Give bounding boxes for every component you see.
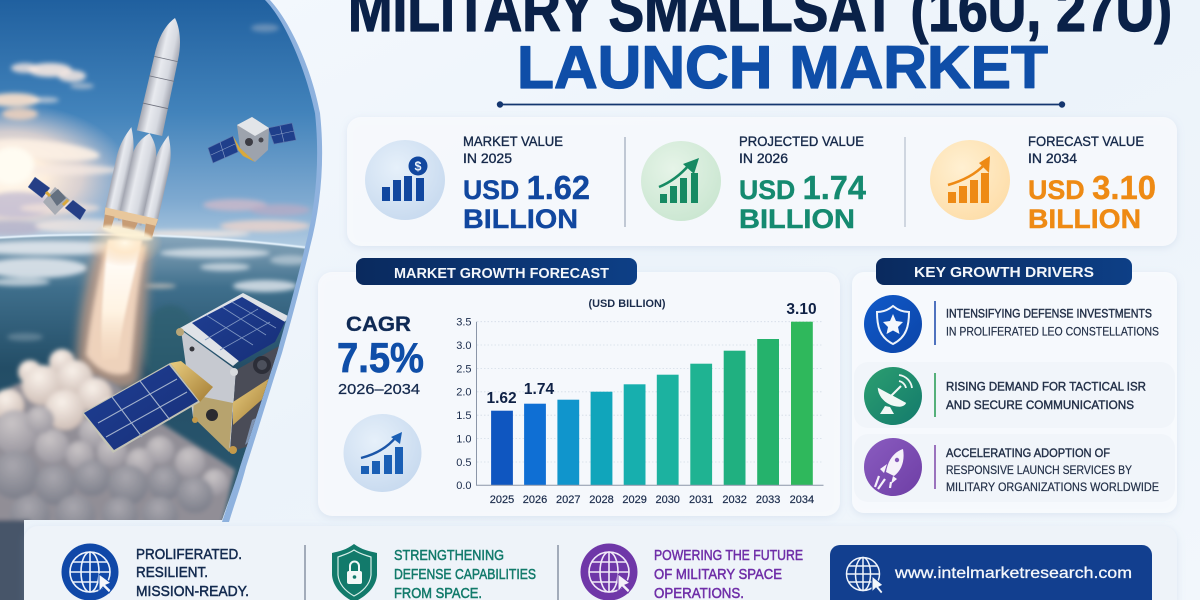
icon: growth chart [344,414,422,492]
exhaust plume [76,219,163,390]
CAGR callout: 7.5% [337,334,424,381]
value labels: 1.74 [524,381,554,398]
icon: globe white [846,558,883,594]
KPI: projected value 2026: PROJECTED VALUE [739,134,864,149]
KPI: forecast value 2034 [930,134,1156,234]
KPI: market value 2025: USD 1.62 [463,169,590,206]
panel: market growth forecast [318,258,840,516]
banner item: powering: OF MILITARY SPACE [654,566,782,583]
y axis labels [456,316,472,492]
icon: rocket [864,438,922,496]
driver 3: responsive launch: ACCELERATING ADOPTION OF [946,446,1110,460]
driver 2: tactical ISR: AND SECURE COMMUNICATIONS [946,398,1134,412]
x axis labels: 2029 [622,494,647,506]
KPI: market value 2025: BILLION [463,204,578,234]
y axis labels: 1.5 [456,410,472,422]
x axis labels: 2028 [589,494,614,506]
KPI: market value 2025 [365,134,590,234]
value labels: 1.62 [487,390,517,407]
KPI: forecast value 2034: IN 2034 [1028,151,1077,166]
KPI: forecast value 2034: FORECAST VALUE [1028,134,1144,149]
bars [491,322,813,485]
driver 3: responsive launch: MILITARY ORGANIZATIONS WORLDWIDE [946,480,1159,494]
CAGR callout: 2026–2034 [338,381,420,398]
title: LAUNCH MARKET [517,34,1048,101]
driver 1: defense investments: IN PROLIFERATED LEO CONSTELLATIONS [946,325,1159,339]
KPI: forecast value 2034: BILLION [1028,204,1141,234]
icon: shield with star [864,295,922,353]
driver 3: responsive launch [864,438,1159,496]
banner item: powering [580,544,803,600]
satellite upper right [208,117,296,163]
y axis labels: 2.5 [456,363,472,375]
value labels [487,301,817,407]
heading pill: key growth drivers [876,258,1132,285]
value labels: 3.10 [786,301,817,318]
banner item: strengthening [332,544,536,600]
y axis labels: 3.0 [456,340,472,352]
KPI: projected value 2026: USD 1.74 [739,169,867,206]
y axis labels: 2.0 [456,387,472,399]
KPI: projected value 2026: IN 2026 [739,151,788,166]
x axis labels: 2025 [490,494,514,506]
banner item: proliferated: RESILIENT. [136,564,208,581]
x axis labels: 2032 [722,494,747,506]
CAGR callout [337,313,424,398]
banner item: powering: POWERING THE FUTURE [654,547,803,564]
bar chart: USD billion 2025-2034 [456,298,824,506]
y axis labels: 3.5 [456,316,472,328]
KPI: forecast value 2034: USD 3.10 [1028,169,1156,206]
banner item: proliferated: MISSION-READY. [136,583,249,600]
banner item: strengthening: STRENGTHENING [394,547,504,564]
banner item: strengthening: DEFENSE CAPABILITIES [394,566,536,583]
x axis labels [490,494,814,506]
title divider [497,101,1065,108]
x axis labels: 2027 [556,494,581,506]
panel: bottom banner [24,526,1177,600]
driver 1: defense investments: INTENSIFYING DEFENSE INVESTMENTS [946,307,1152,321]
x axis labels: 2030 [655,494,680,506]
hero illustration: rocket launch with smallsats over Earth [0,0,330,600]
sky clouds [0,24,310,247]
icon: satellite dish [864,367,922,425]
KPI: projected value 2026: BILLION [739,204,855,234]
x axis labels: 2026 [523,494,547,506]
icon: shield lock [332,544,377,600]
x axis labels: 2034 [790,494,814,506]
earth [0,235,310,530]
satellite left [28,177,86,220]
icon: globe purple [580,544,638,600]
bar chart: USD billion 2025-2034: (USD BILLION) [588,298,666,310]
KPI: market value 2025: MARKET VALUE [463,134,563,149]
driver 3: responsive launch: RESPONSIVE LAUNCH SERVICES BY [946,463,1132,477]
x axis labels: 2031 [689,494,713,506]
KPI: market value 2025: $ [415,160,422,174]
driver 2: tactical ISR: RISING DEMAND FOR TACTICAL ISR [946,380,1146,394]
heading pill: market growth forecast [356,258,637,285]
title [348,0,1172,101]
panel: key market values [347,117,1177,246]
driver 2: tactical ISR [864,367,1146,425]
icon: globe blue [62,544,118,600]
heading pill: key growth drivers: KEY GROWTH DRIVERS [914,264,1094,281]
driver 1: defense investments [864,295,1159,353]
y axis labels: 0.5 [456,457,472,469]
x axis labels: 2033 [756,494,780,506]
website button [830,545,1152,600]
large smallsat foreground [82,293,290,454]
y axis labels: 1.0 [456,433,472,445]
KPI: projected value 2026 [641,134,867,234]
heading pill: market growth forecast: MARKET GROWTH FORECAST [394,265,609,282]
rocket [102,18,180,242]
CAGR callout: CAGR [346,313,411,336]
banner item: proliferated: PROLIFERATED. [136,546,242,563]
launch cloud bank [0,349,235,600]
y axis labels: 0.0 [456,480,472,492]
website button: www.intelmarketresearch.com [894,565,1132,582]
KPI: market value 2025: IN 2025 [463,151,512,166]
panel: key growth drivers [852,258,1177,513]
banner item: proliferated [62,544,249,600]
